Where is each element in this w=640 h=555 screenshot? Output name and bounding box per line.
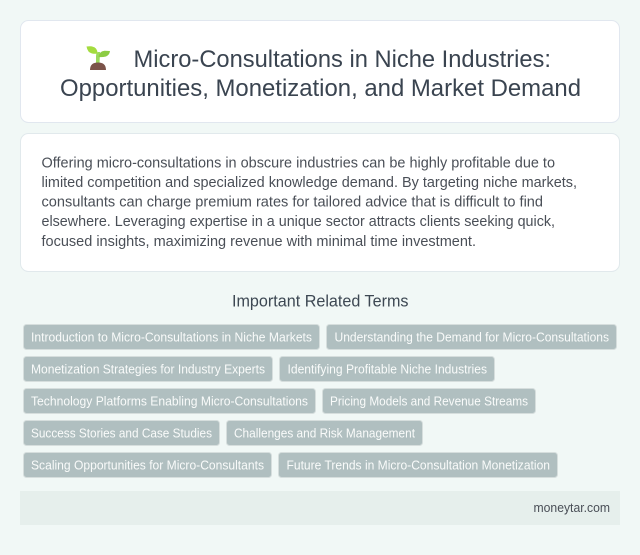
tag: monetization [24,356,272,382]
tag: monetization: Monetization Strategies for Industry Experts [31,362,265,376]
heading: important related terms: Important Related Terms [232,292,408,310]
tag: challenges [226,420,422,446]
panel: title card [20,20,620,122]
description text: elsewhere. Leveraging expertise in a unique sector attracts clients seeking quick, [42,214,555,230]
tag: demand [326,324,616,350]
footer: moneytar.com [534,501,610,515]
footer [20,491,620,525]
tag: introduction: Introduction to Micro-Consultations in Niche Markets [31,330,312,344]
tag: technology: Technology Platforms Enabling Micro-Consultations [31,394,308,408]
tag: scaling [24,452,272,478]
description text: limited competition and specialized knowledge demand. By targeting niche markets, [42,175,577,191]
description text: consultants can charge premium rates for tailored advice that is difficult to find [42,194,543,210]
tag: technology [24,388,316,414]
tag: pricing: Pricing Models and Revenue Streams [330,394,528,408]
tag: scaling: Scaling Opportunities for Micro-Consultants [31,458,264,472]
tag: niche industries: Identifying Profitable Niche Industries [288,362,487,376]
title: Micro-Consultations in Niche Industries: [134,46,551,73]
tag: niche industries [280,356,494,382]
description text: Offering micro-consultations in obscure industries can be highly profitable due to [42,156,555,172]
tag: challenges: Challenges and Risk Management [234,426,415,440]
title [60,46,581,102]
icon: seedling [86,46,110,70]
tag: success stories: Success Stories and Case Studies [31,426,212,440]
tag: pricing [322,388,536,414]
description text: focused insights, maximizing revenue with minimal time investment. [42,234,476,250]
tag: demand: Understanding the Demand for Micro-Consultations [334,330,609,344]
tag: future trends [278,452,558,478]
panel: description card [20,134,620,272]
tag: success stories [24,420,220,446]
panel: term tags [24,324,616,478]
tag: future trends: Future Trends in Micro-Consultation Monetization [286,458,550,472]
title: Opportunities, Monetization, and Market Demand [60,75,581,102]
description text [42,156,577,250]
tag: introduction [24,324,320,350]
